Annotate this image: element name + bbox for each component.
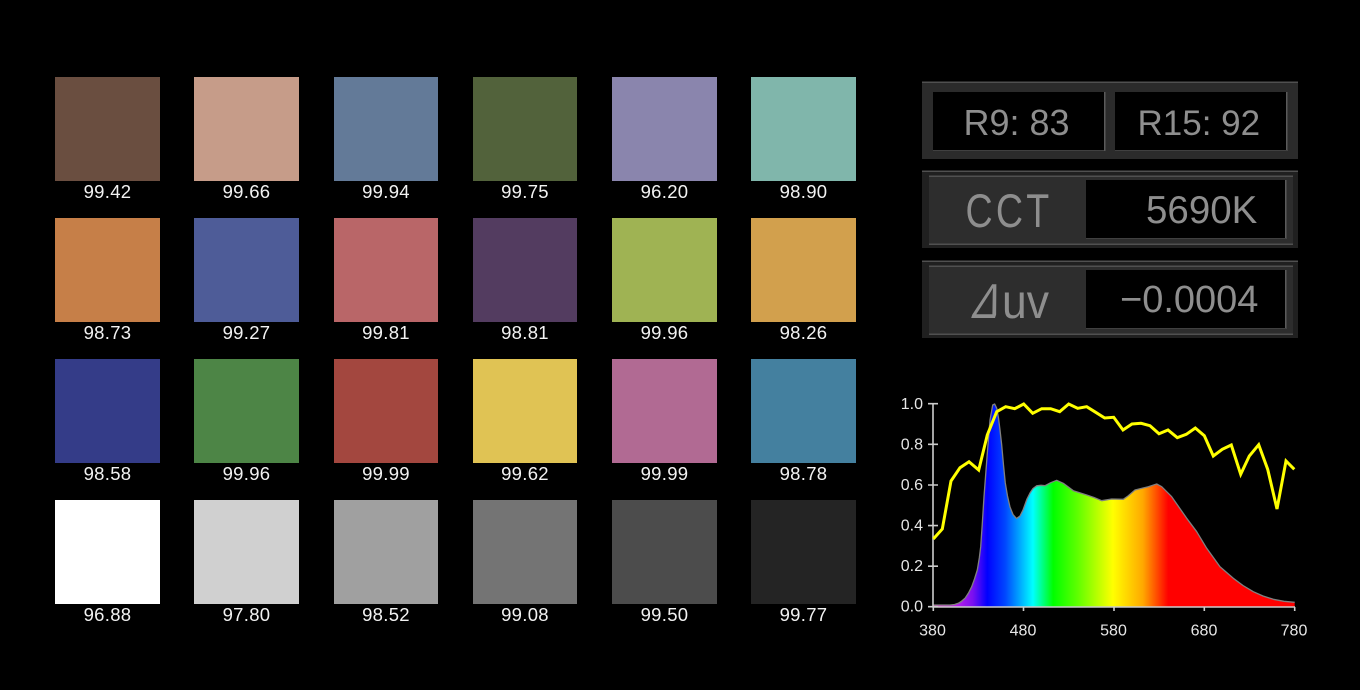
swatch row 3: 99.62 <box>501 463 549 484</box>
swatch row 3: 99.99 <box>362 463 410 484</box>
swatch row 3: 98.78 <box>780 463 827 484</box>
swatch row 4: 96.88 <box>84 604 131 625</box>
x axis labels: 680 <box>1191 622 1217 640</box>
swatch row 1: 96.20 <box>641 181 688 202</box>
swatch row 2: 98.26 <box>780 322 827 343</box>
swatch row 2: 99.27 <box>223 322 270 343</box>
panel: R9 and R15 readout: R15: 92 <box>1138 104 1260 143</box>
chart: spectral power distribution <box>901 396 1307 640</box>
panel: CCT readout: 5690K <box>1146 189 1258 232</box>
x axis labels: 380 <box>919 622 946 640</box>
swatch row 2: 98.81 <box>501 322 549 343</box>
swatch row 4 <box>55 500 856 625</box>
x axis labels: 580 <box>1100 622 1127 640</box>
panel: delta uv readout: uv <box>1002 276 1049 329</box>
swatch row 1 <box>55 77 856 202</box>
spectrum outline <box>933 404 1295 605</box>
panel: color swatch grid <box>55 77 856 625</box>
swatch row 1: 99.42 <box>84 181 131 202</box>
x axis labels <box>919 622 1307 640</box>
x axis labels: 480 <box>1010 622 1036 640</box>
y axis labels <box>901 396 923 616</box>
y axis labels: 1.0 <box>901 396 923 413</box>
panel: R9 and R15 readout: R9: 83 <box>964 102 1070 143</box>
swatch row 4: 99.77 <box>780 604 827 625</box>
panel: delta uv readout: −0.0004 <box>1120 279 1258 321</box>
swatch row 3: 99.96 <box>223 463 270 484</box>
y axis labels: 0.4 <box>901 518 923 534</box>
panel: R9 and R15 readout <box>922 82 1298 159</box>
panel: CCT readout <box>922 170 1298 248</box>
panel: delta uv readout: Δ <box>966 274 1011 329</box>
y axis labels: 0.6 <box>901 477 923 494</box>
y axis labels: 0.0 <box>901 598 923 616</box>
y axis labels: 0.8 <box>901 436 923 454</box>
yellow fidelity line <box>933 404 1294 539</box>
swatch row 4: 99.08 <box>501 604 549 625</box>
swatch row 2: 99.96 <box>641 322 688 343</box>
swatch row 1: 99.66 <box>223 181 270 202</box>
swatch row 1: 99.75 <box>501 181 549 202</box>
swatch row 2: 99.81 <box>362 322 410 343</box>
swatch row 3: 99.99 <box>641 463 688 484</box>
swatch row 2: 98.73 <box>84 322 131 343</box>
swatch row 1: 98.90 <box>780 181 827 202</box>
swatch row 2 <box>55 218 856 343</box>
swatch row 4: 98.52 <box>362 604 410 625</box>
spectrum area <box>933 404 1295 607</box>
swatch row 3 <box>55 359 856 484</box>
x axis labels: 780 <box>1281 622 1307 640</box>
chart axes <box>928 404 1295 611</box>
swatch row 1: 99.94 <box>362 181 410 202</box>
y axis labels: 0.2 <box>901 558 923 575</box>
swatch row 3: 98.58 <box>84 463 131 484</box>
swatch row 4: 99.50 <box>641 604 688 625</box>
swatch row 4: 97.80 <box>223 604 270 625</box>
panel: CCT readout: CCT <box>966 185 1052 238</box>
panel: delta uv readout <box>922 260 1298 338</box>
